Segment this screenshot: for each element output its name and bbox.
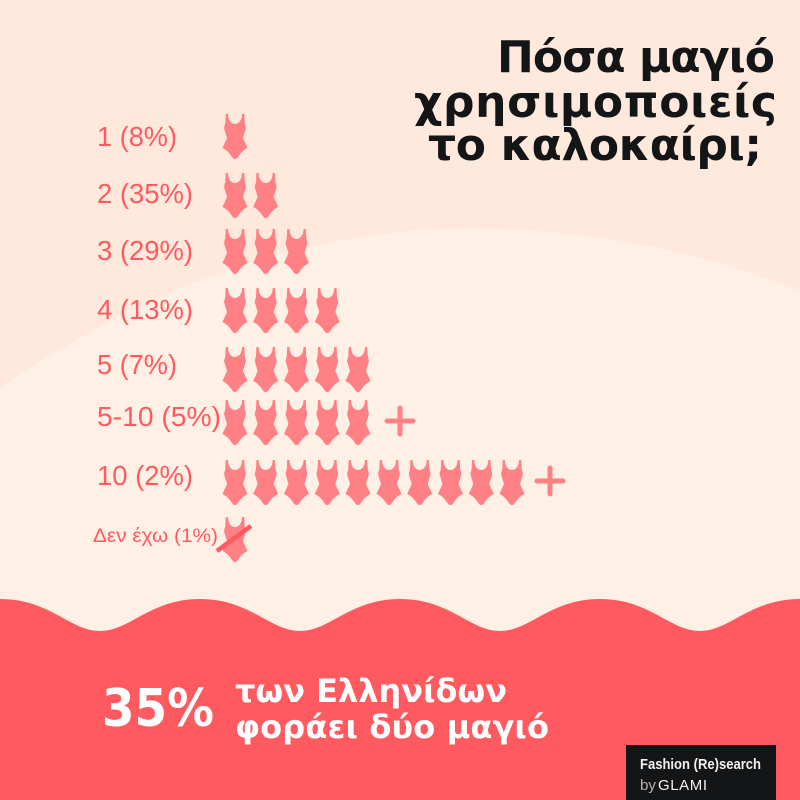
icons: 10 swimsuits [222,460,524,505]
callout: 35% statistic: 35% [102,679,214,739]
label: 4 (13%): 4 (13%) [97,294,193,325]
callout text: των Ελληνίδων [235,672,507,710]
title: Πόσα μαγιό [497,32,775,83]
icon: crossed-out swimsuit [217,517,251,562]
row: 5 swimsuits [97,347,370,392]
logo: Fashion (Re)search by GLAMI [626,745,776,800]
icons: 3 swimsuits [222,229,309,274]
background: lighter curved area [0,229,800,800]
icons: 5 swimsuits [222,347,370,392]
icon: plus [537,468,563,494]
row: 2 swimsuits [97,173,278,218]
title [414,32,777,171]
logo: Fashion (Re)search by GLAMI: Fashion (Re)search [640,756,761,773]
logo: Fashion (Re)search by GLAMI: GLAMI [658,777,707,794]
callout text: φοράει δύο μαγιό [235,708,549,746]
icons: 2 swimsuits [222,173,278,218]
title: χρησιμοποιείς [414,77,777,128]
row: 1 swimsuit [97,114,248,159]
callout text [235,672,549,746]
icons: 5 swimsuits [222,400,370,445]
row: 10+ swimsuits [97,460,563,505]
title: το καλοκαίρι; [428,120,762,171]
label: 5-10 (5%): 5-10 (5%) [97,401,221,432]
icon: plus [387,408,413,434]
row: 3 swimsuits [97,229,309,274]
label: Δεν έχω (1%): Δεν έχω (1%) [93,526,218,547]
label: 1 (8%): 1 (8%) [97,121,177,152]
icons: 1 swimsuit [222,114,248,159]
label: 2 (35%): 2 (35%) [97,178,193,209]
label: 5 (7%): 5 (7%) [97,349,177,380]
row: 4 swimsuits [97,288,340,333]
label: 10 (2%): 10 (2%) [97,460,193,491]
row: 5-10 swimsuits [97,400,413,445]
icons: 4 swimsuits [222,288,340,333]
logo: Fashion (Re)search by GLAMI: by [640,777,657,794]
wavy footer panel [0,599,800,800]
label: 3 (29%): 3 (29%) [97,235,193,266]
row: none [93,517,251,562]
